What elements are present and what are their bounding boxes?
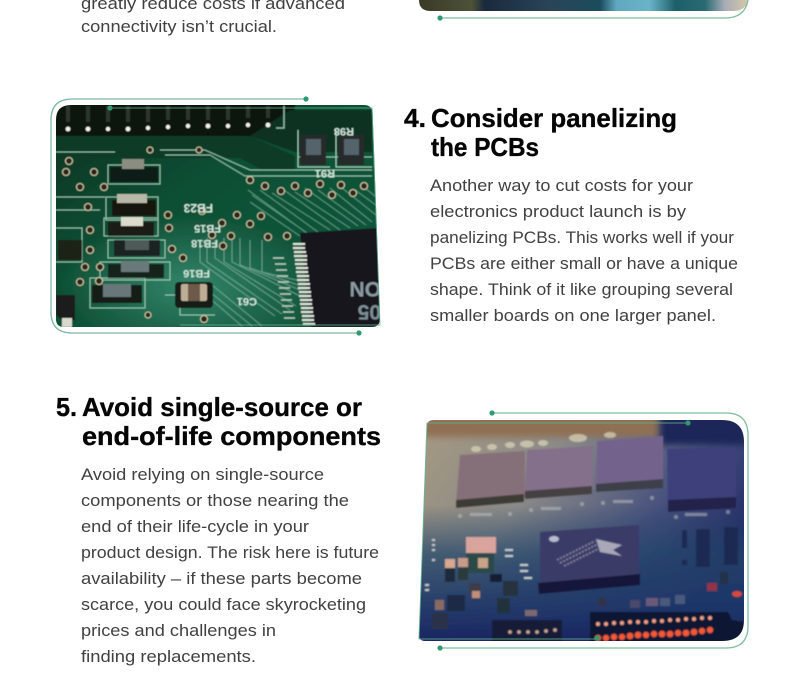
- diagonal trace bundle centre: [200, 238, 300, 326]
- diagonal trace bundle upper right: [248, 188, 380, 237]
- section 4 body text: panelizing PCBs. This works well if your: [430, 228, 734, 247]
- BGA ball arrays: [682, 527, 738, 567]
- BGA main chip: [540, 525, 639, 585]
- section 4 body text: [430, 176, 738, 325]
- silkscreen labels: FB15: [194, 222, 221, 234]
- section 3 text remainder: [81, 0, 345, 36]
- memory chips: [456, 451, 525, 503]
- SMD cluster lower left: [425, 537, 742, 629]
- photo: PCB: [56, 105, 380, 327]
- section 5 body text: availability – if these parts become: [81, 569, 362, 588]
- frame dots: [437, 410, 691, 651]
- SMD components: [56, 130, 372, 327]
- solder glints: [471, 432, 616, 452]
- navy corner: [660, 415, 750, 445]
- section 4 body text: electronics product launch is by: [430, 202, 687, 221]
- frame line: outer: [440, 413, 748, 648]
- header pins: [66, 123, 270, 131]
- silkscreen labels: FB18: [191, 237, 218, 249]
- photo: memory board: [415, 415, 750, 650]
- section 5 heading: [56, 392, 381, 451]
- section 5 body text: prices and challenges in: [81, 621, 276, 640]
- silkscreen labels: FB23: [183, 201, 213, 215]
- section 4 heading: Consider panelizing: [431, 103, 677, 133]
- silkscreen labels: FB16: [183, 267, 210, 279]
- silkscreen labels: C61: [237, 295, 257, 307]
- section 5 body text: product design. The risk here is future: [81, 543, 379, 562]
- section 5 body text: components or those nearing the: [81, 491, 349, 510]
- section 4 body text: shape. Think of it like grouping several: [430, 280, 733, 299]
- section 3 image with frame: [419, 0, 748, 21]
- section 5 heading: 5.: [56, 392, 77, 422]
- section 5 body text: Avoid relying on single-source: [81, 465, 324, 484]
- memory chip labels: [458, 496, 730, 519]
- frame line: outer: [51, 99, 359, 333]
- section 5 body text: end of their life-cycle in your: [81, 517, 309, 536]
- top connector band: [427, 420, 661, 440]
- section 4 heading: 4.: [404, 103, 426, 133]
- section 5 heading: end-of-life components: [82, 421, 381, 451]
- QFP chip with leads: 05: [357, 300, 381, 323]
- section 4 heading: [404, 103, 677, 162]
- section 3 text remainder: connectivity isn’t crucial.: [81, 17, 277, 36]
- section 4 heading: the PCBs: [431, 132, 539, 162]
- frame line: inner over image: [110, 108, 380, 325]
- section 5 image: blue circuit board: [415, 410, 750, 651]
- frame line: inner over image: [419, 423, 688, 639]
- silkscreen labels: R91: [315, 167, 335, 179]
- section 4 image: green circuit board: [50, 96, 385, 355]
- section 4 body text: smaller boards on one larger panel.: [430, 306, 716, 325]
- silkscreen labels: R98: [334, 125, 354, 137]
- section 5 body text: finding replacements.: [81, 647, 256, 666]
- QFP chip with leads: ON: [350, 277, 381, 300]
- dark connector strips: [492, 620, 562, 641]
- QFP chip with leads: [273, 228, 381, 327]
- via rings: [62, 147, 368, 322]
- section 4 body text: Another way to cut costs for your: [430, 176, 693, 195]
- frame dots: [107, 96, 362, 336]
- section 5 body text: scarce, you could face skyrocketing: [81, 595, 366, 614]
- silkscreen labels: [183, 125, 354, 307]
- section 5 heading: Avoid single-source or: [82, 392, 362, 422]
- silk outlines and traces: [56, 150, 372, 315]
- section 4 body text: PCBs are either small or have a unique: [430, 254, 738, 273]
- section 5 body text: [81, 465, 379, 666]
- red LED rows: [596, 616, 712, 626]
